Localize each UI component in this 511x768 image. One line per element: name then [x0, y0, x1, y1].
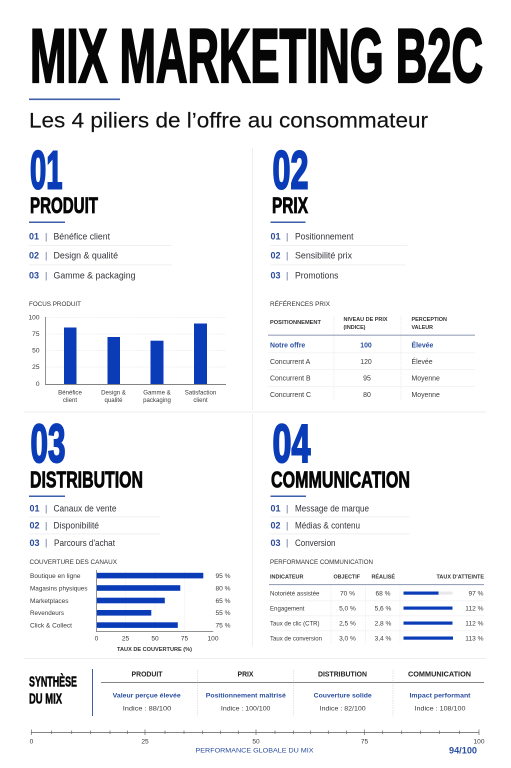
- table: performance communication: 97 %: [468, 590, 484, 598]
- list: prix: 01: [270, 232, 281, 242]
- bar chart: couverture des canaux: Boutique en ligne: [30, 573, 81, 580]
- list: prix: 03: [270, 270, 281, 280]
- table: références prix: VALEUR: [412, 325, 434, 331]
- chart heading: couverture des canaux: COUVERTURE DES CANAUX: [30, 559, 118, 566]
- section number 03: 03: [30, 414, 66, 474]
- list: communication: Conversion: [295, 538, 336, 549]
- table: références prix: Élevée: [412, 340, 434, 350]
- bar chart: focus produit: [28, 315, 226, 404]
- list: produit: |: [45, 250, 47, 260]
- heading: distribution: DISTRIBUTION: [30, 466, 143, 492]
- table: synthèse: Indice : 108/100: [414, 705, 466, 712]
- table heading: performance communication: PERFORMANCE COMMUNICATION: [270, 559, 373, 566]
- table: performance communication: 112 %: [465, 606, 484, 612]
- table: synthèse: Indice : 88/100: [123, 705, 172, 712]
- list: communication: |: [286, 520, 288, 530]
- list: communication: [270, 503, 410, 549]
- list: produit: Design & qualité: [54, 250, 118, 262]
- subtitle: Les 4 piliers de l’offre au consommateur: [29, 108, 428, 132]
- panel: synthèse du mix: [29, 669, 484, 716]
- bar chart: couverture des canaux: Magasins physiques: [30, 585, 88, 592]
- bar chart: couverture des canaux: 75: [181, 636, 188, 642]
- table: synthèse: Indice : 100/100: [221, 705, 271, 712]
- table: performance communication: INDICATEUR: [270, 575, 304, 581]
- heading: synthèse du mix: [29, 674, 77, 708]
- bar chart: couverture des canaux: 80 %: [215, 585, 231, 592]
- bar chart: couverture des canaux: 50: [151, 636, 159, 642]
- performance scale: 0: [30, 738, 34, 745]
- table: performance communication: Taux de conversion: [270, 636, 322, 642]
- label: performance globale: PERFORMANCE GLOBALE DU MIX: [196, 748, 314, 754]
- bar chart: couverture des canaux: [30, 570, 231, 653]
- table: performance communication: 3,4 %: [375, 636, 392, 642]
- heading: prix: PRIX: [272, 193, 308, 218]
- bar chart: couverture des canaux: 65 %: [215, 598, 231, 605]
- list: communication: Message de marque: [295, 504, 369, 514]
- table: performance communication: 70 %: [340, 590, 355, 598]
- list: produit: 01: [29, 232, 39, 242]
- performance scale: 75: [361, 738, 368, 745]
- bar chart: focus produit: Bénéfice: [58, 390, 82, 396]
- bar chart: focus produit: 25: [32, 364, 40, 371]
- table: performance communication: RÉALISÉ: [372, 573, 395, 581]
- list: produit: Bénéfice client: [54, 232, 110, 242]
- list: distribution: [29, 503, 160, 549]
- table: références prix: Concurrent B: [270, 376, 311, 382]
- bar chart: focus produit: Design &: [101, 390, 126, 396]
- bar chart: couverture des canaux: Click & Collect: [30, 622, 72, 630]
- list: produit: Gamme & packaging: [54, 270, 136, 282]
- section number 02: 02: [272, 140, 308, 200]
- bar chart: couverture des canaux: TAUX DE COUVERTURE (%): [117, 647, 192, 653]
- table: références prix: NIVEAU DE PRIX: [344, 317, 388, 323]
- bar chart: focus produit: 0: [36, 381, 40, 388]
- list: distribution: 02: [30, 520, 40, 530]
- bar chart: focus produit: Satisfaction: [185, 390, 216, 396]
- list: produit: 03: [29, 270, 39, 280]
- bar chart: couverture des canaux: 75 %: [215, 622, 231, 630]
- panel: distribution: [29, 414, 231, 653]
- table: références prix: (INDICE): [344, 325, 366, 331]
- table: performance communication: 5,0 %: [339, 606, 356, 612]
- bar chart: focus produit: packaging: [143, 397, 171, 404]
- table: performance communication: 68 %: [375, 590, 391, 598]
- bar chart: couverture des canaux: 55 %: [215, 610, 231, 617]
- list: prix: 02: [270, 250, 281, 260]
- list: prix: |: [286, 270, 288, 280]
- list: distribution: Parcours d'achat: [54, 538, 115, 549]
- heading: synthèse du mix: SYNTHÈSE: [29, 674, 77, 690]
- table: références prix: Élevée: [412, 357, 433, 366]
- list: distribution: Disponibilité: [54, 520, 99, 532]
- table: synthèse: Couverture solide: [314, 692, 372, 700]
- table: performance communication: [269, 573, 484, 644]
- list: produit: |: [45, 270, 47, 280]
- table: synthèse: [101, 670, 484, 716]
- bar chart: focus produit: 75: [32, 331, 40, 338]
- bar chart: couverture des canaux: 25: [122, 636, 129, 642]
- table: références prix: 95: [363, 376, 371, 382]
- table: synthèse: Impact performant: [410, 692, 471, 700]
- table: références prix: 80: [363, 392, 371, 399]
- list: distribution: 03: [30, 538, 40, 548]
- table: synthèse: Indice : 82/100: [320, 705, 366, 712]
- section number 01: 01: [30, 140, 62, 200]
- table: références prix: [268, 316, 475, 400]
- list: produit: |: [45, 231, 47, 241]
- list: produit: 02: [29, 250, 39, 260]
- bar chart: focus produit: qualité: [105, 397, 123, 404]
- list: distribution: Canaux de vente: [54, 504, 116, 514]
- bar chart: focus produit: client: [63, 397, 77, 404]
- list: prix: |: [286, 231, 288, 241]
- table: performance communication: 5,6 %: [375, 606, 392, 612]
- list: distribution: 01: [30, 504, 40, 514]
- bar chart: focus produit: client: [193, 397, 208, 404]
- bar chart: couverture des canaux: 100: [207, 636, 219, 642]
- section number 04: 04: [272, 414, 310, 474]
- table: synthèse: PRODUIT: [132, 672, 163, 678]
- table: performance communication: Notoriété assistée: [270, 590, 320, 598]
- table: performance communication: Engagement: [270, 606, 305, 612]
- panel: produit: [28, 140, 226, 404]
- table: performance communication: TAUX D'ATTEINTE: [436, 575, 484, 581]
- list: prix: [270, 231, 408, 282]
- table: références prix: 100: [360, 342, 372, 350]
- chart heading: focus produit: FOCUS PRODUIT: [29, 301, 81, 308]
- table: performance communication: 113 %: [465, 636, 484, 642]
- table: synthèse: DISTRIBUTION: [318, 672, 367, 678]
- table: synthèse: Valeur perçue élevée: [113, 692, 181, 700]
- list: distribution: |: [45, 520, 47, 530]
- performance scale: 25: [141, 738, 149, 745]
- list: prix: Positionnement: [295, 232, 354, 242]
- list: produit: [29, 231, 172, 282]
- list: communication: 03: [270, 538, 281, 548]
- performance scale: [30, 730, 485, 756]
- table: références prix: Concurrent A: [270, 359, 311, 366]
- table: références prix: 120: [360, 359, 372, 366]
- table: performance communication: 2,5 %: [339, 620, 356, 628]
- list: communication: |: [286, 538, 288, 548]
- table: références prix: Moyenne: [412, 392, 440, 399]
- list: prix: Sensibilité prix: [295, 250, 352, 262]
- panel: communication: [269, 414, 484, 644]
- list: communication: Médias & contenu: [295, 520, 360, 532]
- performance scale: 50: [252, 738, 260, 745]
- list: distribution: |: [45, 538, 47, 548]
- table: références prix: POSITIONNEMENT: [270, 320, 321, 326]
- heading: produit: PRODUIT: [30, 193, 98, 218]
- table heading: références prix: RÉFÉRENCES PRIX: [270, 299, 331, 308]
- table: références prix: Concurrent C: [270, 392, 311, 399]
- bar chart: couverture des canaux: 0: [95, 636, 99, 642]
- table: performance communication: OBJECTIF: [334, 575, 360, 581]
- bar chart: focus produit: Gamme &: [143, 390, 171, 396]
- panel: prix: [268, 140, 475, 400]
- table: performance communication: Taux de clic (CTR): [270, 620, 320, 628]
- table: performance communication: 3,0 %: [339, 636, 356, 642]
- table: références prix: Moyenne: [412, 376, 440, 382]
- table: performance communication: 2,8 %: [375, 620, 392, 628]
- performance scale: 100: [473, 738, 485, 745]
- list: communication: 02: [270, 520, 281, 530]
- list: distribution: |: [45, 503, 47, 513]
- bar chart: focus produit: 50: [32, 348, 40, 355]
- score: 94/100: 94/100: [449, 746, 477, 756]
- bar chart: couverture des canaux: Marketplaces: [30, 598, 69, 605]
- bar chart: couverture des canaux: 95 %: [215, 573, 231, 580]
- heading: synthèse du mix: DU MIX: [29, 690, 62, 708]
- list: prix: Promotions: [295, 270, 339, 282]
- bar chart: couverture des canaux: Revendeurs: [30, 610, 65, 617]
- list: communication: |: [286, 503, 288, 513]
- list: prix: |: [286, 250, 288, 260]
- table: synthèse: PRIX: [238, 672, 254, 678]
- list: communication: 01: [270, 504, 281, 514]
- table: synthèse: Positionnement maîtrisé: [206, 692, 286, 700]
- bar chart: focus produit: 100: [28, 315, 40, 322]
- heading: communication: COMMUNICATION: [271, 466, 410, 492]
- table: synthèse: COMMUNICATION: [408, 672, 471, 678]
- table: références prix: PERCEPTION: [412, 317, 447, 323]
- table: performance communication: 112 %: [465, 620, 484, 628]
- table: références prix: Notre offre: [270, 342, 305, 350]
